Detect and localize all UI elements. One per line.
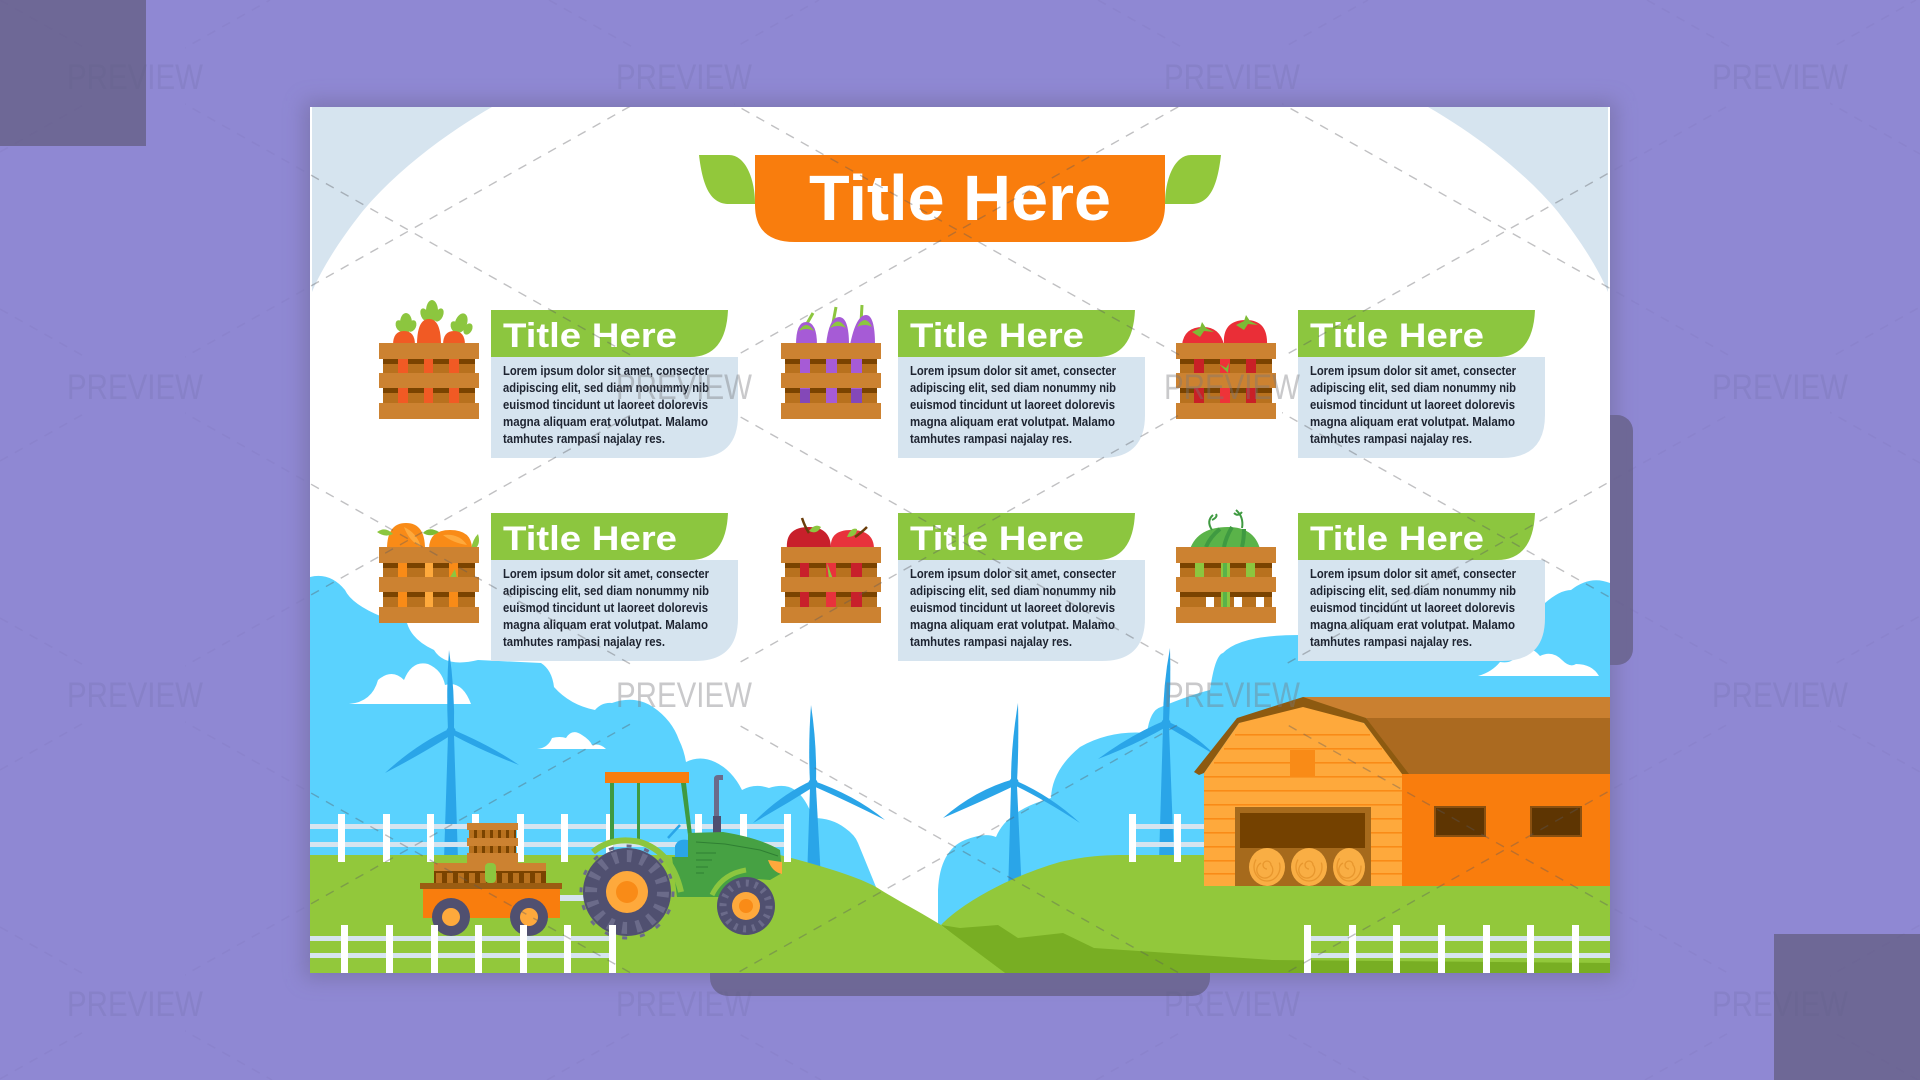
small wheel [717, 877, 775, 935]
barn side roof [1303, 697, 1610, 718]
card 3: magna aliquam erat volutpat. Malamo [1310, 415, 1515, 429]
crate: eggplants [781, 305, 881, 419]
panel: farm poster [310, 107, 1610, 973]
back fence: right [1129, 814, 1206, 862]
crate: watermelon [1176, 510, 1276, 623]
card 5: magna aliquam erat volutpat. Malamo [910, 618, 1115, 632]
card 6: tamhutes rampasi najalay res. [1310, 635, 1472, 649]
barn side windows [1435, 807, 1485, 836]
barn loft door [1290, 750, 1315, 776]
card 3: Lorem ipsum dolor sit amet, consecter [1310, 364, 1516, 378]
barn front [1204, 704, 1402, 886]
hill: right [941, 855, 1610, 973]
left leaf [699, 155, 755, 204]
wind turbine 2 [753, 705, 885, 880]
watermarks outside panel: PREVIEW [1164, 58, 1300, 97]
card 1: euismod tincidunt ut laoreet dolorevis [503, 398, 708, 412]
landscape: right sky cloud [938, 580, 1610, 925]
white cloud 1 [349, 663, 471, 704]
wind turbine 1 [385, 650, 519, 860]
small fender [712, 870, 746, 895]
card 1: Lorem ipsum dolor sit amet, consecter [503, 364, 709, 378]
hay bales [1249, 848, 1365, 886]
front fence: left [310, 925, 616, 973]
watermarks outside panel: PREVIEW [1164, 985, 1300, 1024]
watermarks outside panel: PREVIEW [1712, 985, 1848, 1024]
wind turbine 4 [1098, 648, 1215, 860]
card 1: magna aliquam erat volutpat. Malamo [503, 415, 708, 429]
wind turbine 3 [943, 703, 1080, 895]
right leaf [1165, 155, 1221, 204]
card 2: euismod tincidunt ut laoreet dolorevis [910, 398, 1115, 412]
lower crates [434, 871, 546, 883]
card 4: euismod tincidunt ut laoreet dolorevis [503, 601, 708, 615]
card 4: tamhutes rampasi najalay res. [503, 635, 665, 649]
large fender [593, 840, 681, 892]
main title: Title Here [809, 162, 1111, 234]
watermarks outside panel: PREVIEW [1712, 676, 1848, 715]
hill: left [310, 855, 1005, 973]
card 5: tamhutes rampasi najalay res. [910, 635, 1072, 649]
main title banner [699, 155, 1221, 242]
watermark text on panel: PREVIEW [1164, 676, 1300, 715]
card 3: tamhutes rampasi najalay res. [1310, 432, 1472, 446]
card 6: magna aliquam erat volutpat. Malamo [1310, 618, 1515, 632]
cab posts [610, 783, 614, 843]
white cloud 3 [1478, 649, 1599, 676]
trailer wheels [432, 898, 470, 936]
accent block behind panel: bottom [710, 900, 1210, 996]
watermark text on panel [616, 368, 1300, 715]
card 2: Title Here [910, 317, 1084, 355]
trailer with crates [420, 823, 562, 936]
card 5: adipiscing elit, sed diam nonummy nib [910, 584, 1116, 598]
card 3 [1298, 310, 1545, 458]
card 2: magna aliquam erat volutpat. Malamo [910, 415, 1115, 429]
landscape: left sky cloud [310, 576, 876, 900]
barn side wall [1402, 774, 1610, 886]
hill shadow [941, 925, 1610, 973]
card 2 [898, 310, 1145, 458]
card 4 [491, 513, 738, 661]
accent block behind panel: right [1540, 415, 1633, 665]
barn roof outline [1194, 697, 1409, 775]
crate: tomatoes [1176, 315, 1276, 419]
card 4: Title Here [503, 520, 677, 558]
tow bar [560, 895, 584, 901]
watermarks outside panel: PREVIEW [1712, 368, 1848, 407]
card 6: Title Here [1310, 520, 1484, 558]
card 3: euismod tincidunt ut laoreet dolorevis [1310, 398, 1515, 412]
front fence: right [1304, 925, 1610, 973]
trailer deck [420, 883, 562, 889]
card 5: Title Here [910, 520, 1084, 558]
card 5: euismod tincidunt ut laoreet dolorevis [910, 601, 1115, 615]
watermark text on panel: PREVIEW [1164, 368, 1300, 407]
card 4: Lorem ipsum dolor sit amet, consecter [503, 567, 709, 581]
large wheel [581, 846, 673, 938]
watermarks outside panel: PREVIEW [67, 676, 203, 715]
card 1: adipiscing elit, sed diam nonummy nib [503, 381, 709, 395]
crate: carrots [379, 300, 479, 419]
upper crate [474, 830, 516, 853]
banner shape [755, 155, 1165, 242]
tractor [581, 772, 782, 938]
card 1: tamhutes rampasi najalay res. [503, 432, 665, 446]
card 2: Lorem ipsum dolor sit amet, consecter [910, 364, 1116, 378]
card 5: Lorem ipsum dolor sit amet, consecter [910, 567, 1116, 581]
corner shade: top right [1428, 107, 1608, 292]
card 4: adipiscing elit, sed diam nonummy nib [503, 584, 709, 598]
headlight [768, 860, 782, 874]
card 2: tamhutes rampasi najalay res. [910, 432, 1072, 446]
card 6: euismod tincidunt ut laoreet dolorevis [1310, 601, 1515, 615]
corner shade: top left [312, 107, 492, 292]
card 3: adipiscing elit, sed diam nonummy nib [1310, 381, 1516, 395]
card 4: magna aliquam erat volutpat. Malamo [503, 618, 708, 632]
exhaust [714, 775, 723, 817]
card 1: Title Here [503, 317, 677, 355]
back fence: left [310, 814, 791, 862]
watermark text on panel: PREVIEW [616, 368, 752, 407]
corner block: bottom right [1774, 934, 1920, 1080]
watermarks outside panel: PREVIEW [1712, 58, 1848, 97]
card 2: adipiscing elit, sed diam nonummy nib [910, 381, 1116, 395]
seat and steering [675, 840, 688, 858]
watermarks outside panel: PREVIEW [616, 58, 752, 97]
canopy [605, 772, 689, 783]
watermarks outside panel: PREVIEW [67, 58, 203, 97]
barn [1194, 697, 1610, 886]
card 6: Lorem ipsum dolor sit amet, consecter [1310, 567, 1516, 581]
watermark text on panel: PREVIEW [616, 676, 752, 715]
white cloud 2 [537, 732, 606, 749]
card 5 [898, 513, 1145, 661]
card 6: adipiscing elit, sed diam nonummy nib [1310, 584, 1516, 598]
watermarks outside panel: PREVIEW [67, 368, 203, 407]
watermarks outside panel: PREVIEW [67, 985, 203, 1024]
card 1 [491, 310, 738, 458]
panel shadow [304, 101, 1616, 979]
card 6 [1298, 513, 1545, 661]
crate: apples [781, 518, 881, 623]
crate: oranges [377, 523, 479, 623]
card 3: Title Here [1310, 317, 1484, 355]
corner block: top left [0, 0, 146, 146]
watermarks outside panel: PREVIEW [616, 985, 752, 1024]
barn door [1235, 807, 1371, 886]
tractor body [672, 832, 782, 897]
